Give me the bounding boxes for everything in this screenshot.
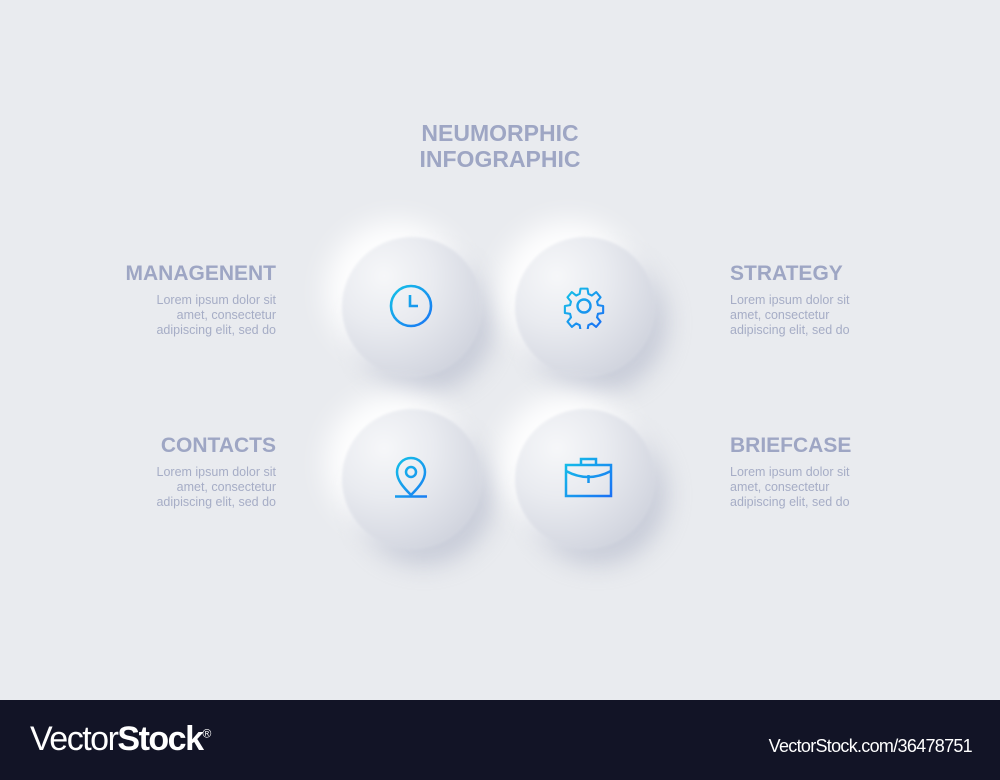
heading: contacts: CONTACTS xyxy=(161,434,276,457)
icon: clock xyxy=(390,284,432,328)
panel: contacts xyxy=(156,434,276,509)
text: strategy xyxy=(730,293,850,337)
text: contacts: Lorem ipsum dolor sit xyxy=(156,465,276,479)
title: INFOGRAPHIC xyxy=(420,146,580,172)
text: briefcase: Lorem ipsum dolor sit xyxy=(730,465,850,479)
text: contacts: amet, consectetur xyxy=(177,480,276,494)
text: contacts: adipiscing elit, sed do xyxy=(156,495,276,509)
heading: briefcase: BRIEFCASE xyxy=(730,434,851,457)
text: contacts xyxy=(156,465,276,509)
sphere: bottom-right xyxy=(515,409,655,549)
text: strategy: amet, consectetur xyxy=(730,308,829,322)
icon: location pin xyxy=(395,456,427,498)
text: strategy: adipiscing elit, sed do xyxy=(730,323,850,337)
sphere: top-right xyxy=(515,237,655,377)
text: management: adipiscing elit, sed do xyxy=(156,323,276,337)
text: management xyxy=(156,293,276,337)
panel: management xyxy=(126,262,276,337)
text: briefcase xyxy=(730,465,850,509)
footer url: VectorStock.com/36478751 xyxy=(769,736,972,756)
footer logo: VectorStock® xyxy=(30,720,210,758)
title xyxy=(420,120,580,172)
panel: strategy xyxy=(730,262,850,337)
text: briefcase: amet, consectetur xyxy=(730,480,829,494)
text: briefcase: adipiscing elit, sed do xyxy=(730,495,850,509)
heading: strategy: STRATEGY xyxy=(730,262,843,285)
panel: briefcase xyxy=(730,434,851,509)
sphere: bottom-left xyxy=(342,409,482,549)
sphere: top-left xyxy=(342,237,482,377)
text: management: amet, consectetur xyxy=(177,308,276,322)
icon: briefcase xyxy=(564,458,612,498)
icon: gear xyxy=(564,288,604,329)
text: management: Lorem ipsum dolor sit xyxy=(156,293,276,307)
text: strategy: Lorem ipsum dolor sit xyxy=(730,293,850,307)
footer bar xyxy=(0,700,1000,780)
title: NEUMORPHIC xyxy=(421,120,579,146)
heading: management: MANAGENENT xyxy=(126,262,276,285)
